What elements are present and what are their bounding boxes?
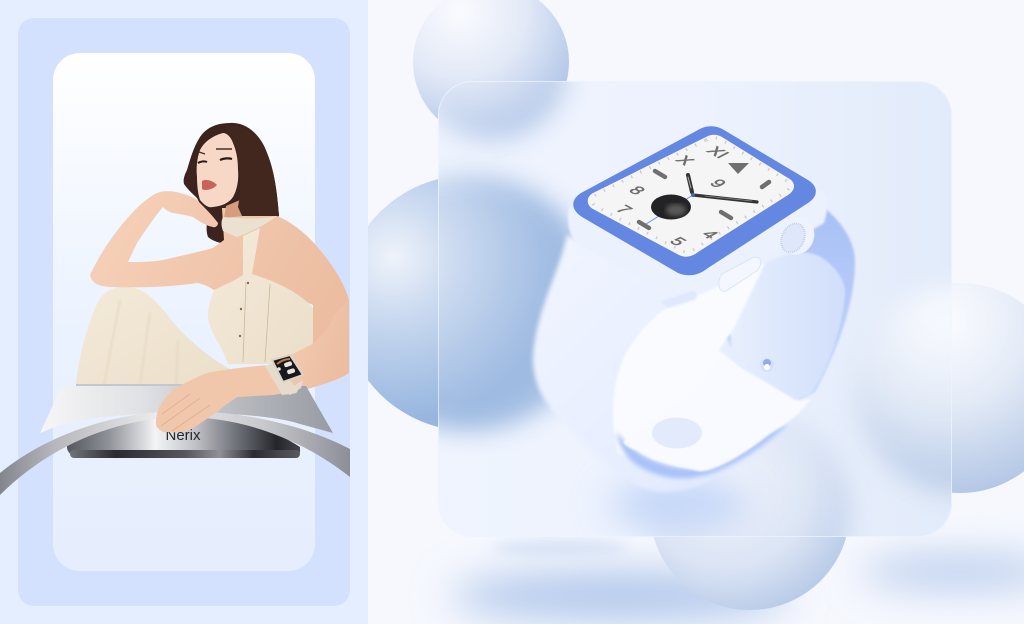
neck shading [224, 200, 242, 218]
strap: shadow under keeper [712, 333, 732, 362]
background right [368, 0, 1024, 624]
hour markers [639, 171, 769, 228]
big watch [533, 126, 855, 492]
buttons [239, 282, 249, 337]
dial numerals: XI [702, 144, 733, 161]
strap [265, 362, 298, 395]
strap: tongue button [652, 418, 702, 448]
sweep hand [646, 195, 693, 224]
left inner card [53, 53, 315, 571]
dial numerals: 8 [624, 184, 649, 197]
strap: inner face [613, 263, 790, 470]
strap: front outer [533, 235, 791, 492]
hand [156, 365, 292, 432]
screen complications [277, 359, 296, 375]
small watch [265, 355, 303, 395]
dial numerals: 9 [705, 177, 730, 190]
metal disc [67, 418, 300, 454]
dial numerals [611, 144, 733, 248]
sphere: bottom [654, 537, 846, 610]
left panel card [18, 18, 350, 606]
facial features [198, 149, 232, 190]
sphere: left [368, 179, 438, 427]
dial numerals: 5 [665, 235, 690, 248]
triangle marker [728, 163, 749, 174]
spheres behind glass [342, 0, 1024, 610]
bodice seams [243, 282, 270, 362]
pants folds [104, 301, 150, 383]
dial numerals: 7 [611, 203, 636, 216]
strap: blue shadow [616, 424, 788, 478]
left panel background [0, 0, 368, 624]
side button [719, 257, 761, 291]
floor shadows [450, 541, 1024, 620]
disc rim [70, 450, 300, 458]
pedestal top rim [76, 384, 184, 386]
scarf [222, 216, 277, 237]
torso and left arm skin [90, 191, 349, 343]
hair front right [238, 140, 279, 216]
face [197, 133, 238, 207]
case [272, 355, 303, 382]
Nerix pedestal [0, 384, 350, 495]
hands [688, 175, 757, 202]
flange [40, 386, 333, 433]
strap: blue outer band [798, 206, 855, 400]
dial numerals: X [671, 153, 698, 168]
bezel [573, 126, 816, 275]
hand fingers on chin shading [194, 201, 216, 226]
subdial [651, 194, 691, 220]
hub [691, 193, 695, 197]
model [76, 123, 349, 394]
dial numerals: 4 [697, 228, 722, 241]
strap: back inner [719, 252, 845, 400]
arched band [0, 411, 350, 495]
strap and bodice [208, 228, 313, 364]
crown [774, 212, 820, 260]
case lug [660, 291, 697, 308]
strap: tongue [623, 355, 811, 471]
hair back [184, 123, 279, 243]
sphere: top [413, 0, 569, 119]
glass panel [438, 81, 952, 537]
brand label: Nerix [165, 427, 201, 444]
sphere: right [952, 284, 1024, 493]
dial [588, 135, 794, 257]
pants [76, 287, 238, 386]
dial ticks [592, 138, 789, 252]
strap hole [760, 358, 774, 372]
case body [568, 133, 827, 297]
lower right arm [290, 339, 349, 389]
